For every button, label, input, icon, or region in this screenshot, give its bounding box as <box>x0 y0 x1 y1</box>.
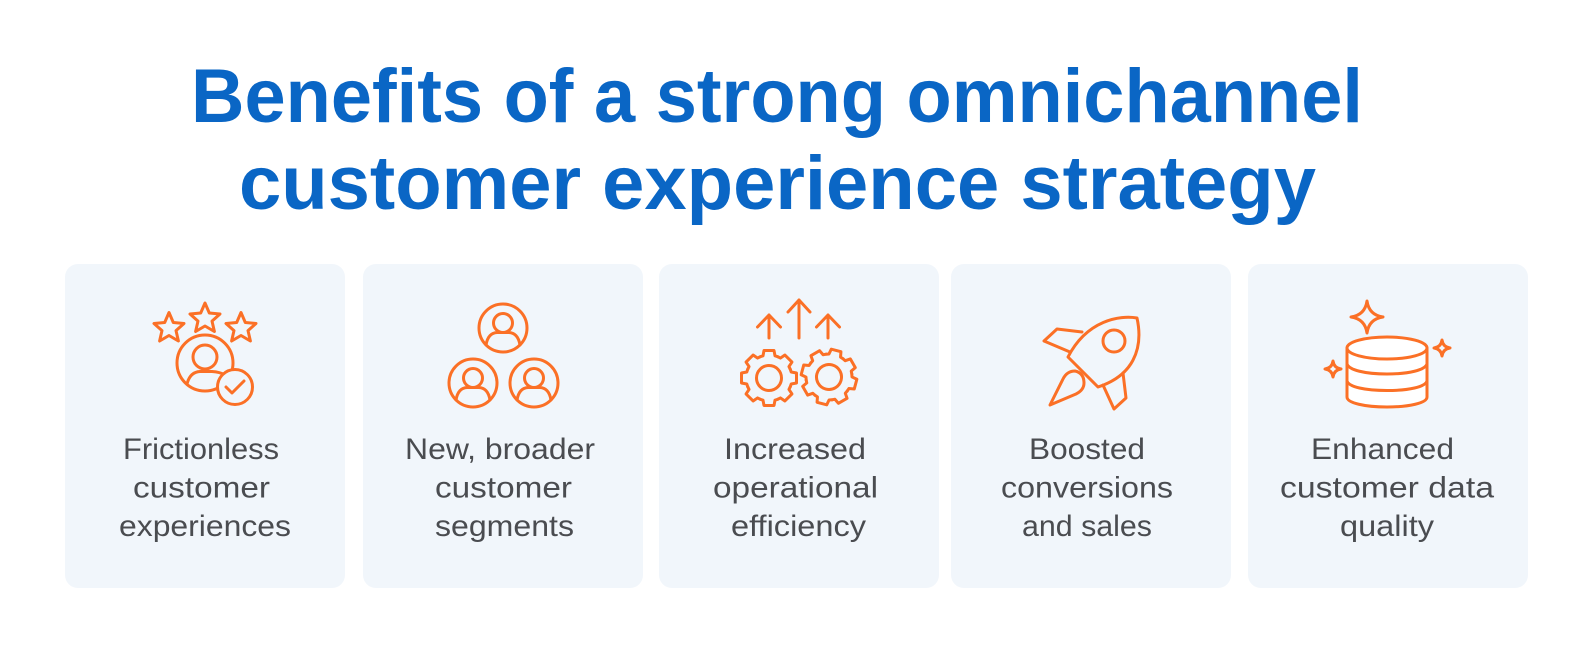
caption: New, broader <box>405 433 595 466</box>
caption: efficiency <box>731 510 866 543</box>
panel: increased operational efficiency <box>659 264 939 588</box>
icon: gears with up arrows <box>742 300 863 411</box>
title: Benefits of a strong omnichannel <box>191 54 1363 139</box>
caption: conversions <box>1001 472 1173 504</box>
caption: operational <box>713 472 878 504</box>
caption <box>119 433 291 543</box>
caption: Increased <box>724 433 866 466</box>
caption <box>1280 433 1494 543</box>
caption: and sales <box>1022 510 1152 543</box>
caption: Boosted <box>1029 433 1145 466</box>
caption <box>405 433 595 543</box>
panel: frictionless customer experiences <box>65 264 345 588</box>
caption: customer data <box>1280 472 1494 504</box>
caption <box>1001 433 1173 543</box>
icon: rated customer with stars and check <box>154 303 256 404</box>
icon: rocket <box>1044 317 1139 409</box>
caption: Frictionless <box>123 433 279 466</box>
panel: enhanced customer data quality <box>1248 264 1528 588</box>
title: customer experience strategy <box>239 141 1316 226</box>
icon: three customers <box>449 304 558 407</box>
caption: customer <box>435 472 572 504</box>
caption: quality <box>1340 510 1434 543</box>
caption <box>713 433 878 543</box>
caption: Enhanced <box>1311 433 1454 466</box>
title <box>191 54 1363 226</box>
panel: new, broader customer segments <box>363 264 643 588</box>
icon: database with sparkles <box>1325 301 1450 407</box>
panel: boosted conversions and sales <box>951 264 1231 588</box>
caption: experiences <box>119 510 291 543</box>
caption: customer <box>133 472 270 504</box>
caption: segments <box>435 510 574 543</box>
